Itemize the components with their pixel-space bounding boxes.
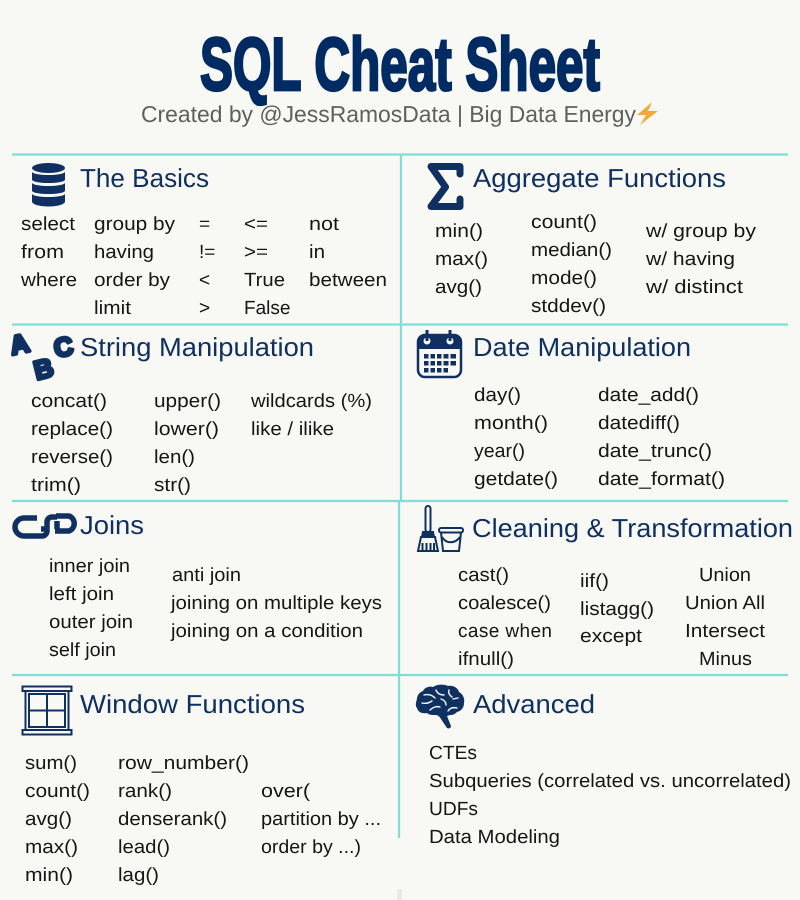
- function list: month(): [474, 413, 548, 434]
- function list: [435, 212, 757, 317]
- function list: partition by ...: [261, 809, 381, 830]
- function list: coalesce(): [458, 593, 551, 614]
- function list: w/ distinct: [645, 277, 744, 298]
- keyword list: having: [94, 242, 154, 263]
- function list: getdate(): [474, 469, 558, 490]
- function list: cast(): [458, 565, 509, 586]
- heading: Cleaning & Transformation: [472, 513, 793, 543]
- icon: brain: [416, 685, 464, 728]
- join list: joining on multiple keys: [170, 593, 382, 614]
- keyword list: group by: [94, 214, 176, 235]
- keyword list: !=: [199, 242, 215, 263]
- panel: Advanced: [416, 685, 791, 848]
- icon: window: [22, 686, 72, 734]
- function list: date_trunc(): [598, 441, 712, 462]
- heading: Joins: [80, 510, 144, 540]
- heading: String Manipulation: [80, 332, 314, 362]
- function list: date_format(): [598, 469, 725, 490]
- function list: str(): [154, 475, 191, 496]
- function list: count(): [25, 781, 90, 802]
- panel: String Manipulation: [7, 327, 372, 496]
- icon: calendar: [417, 330, 462, 377]
- heading: The Basics: [80, 163, 209, 193]
- keyword list: between: [309, 270, 387, 291]
- join list: [49, 556, 382, 661]
- function list: mode(): [531, 268, 597, 289]
- heading: Window Functions: [80, 689, 305, 719]
- subtitle: Created by @JessRamosData | Big Data Energy: [141, 101, 636, 127]
- function list: except: [580, 626, 643, 647]
- function list: count(): [531, 212, 597, 233]
- join list: self join: [49, 640, 116, 661]
- function list: max(): [435, 249, 488, 270]
- join list: anti join: [172, 565, 241, 586]
- function list: lag(): [118, 865, 159, 886]
- join list: joining on a condition: [170, 621, 363, 642]
- function list: concat(): [31, 391, 107, 412]
- function list: over(: [261, 781, 311, 802]
- function list: [25, 753, 381, 886]
- icon: sigma: [431, 166, 460, 206]
- function list: sum(): [25, 753, 77, 774]
- icon: lightning bolt: [637, 102, 658, 125]
- icon: ABC letters: B: [31, 352, 56, 386]
- panel: The Basics: [20, 163, 387, 319]
- keyword list: >: [199, 298, 210, 319]
- keyword list: from: [21, 242, 64, 263]
- function list: min(): [25, 865, 73, 886]
- keyword list: False: [244, 298, 290, 319]
- topic list: Subqueries (correlated vs. uncorrelated): [429, 771, 791, 792]
- function list: year(): [474, 441, 525, 462]
- icon: broom and bucket: [418, 506, 463, 551]
- panel: Cleaning & Transformation: [418, 506, 793, 670]
- function list: max(): [25, 837, 78, 858]
- topic list: UDFs: [429, 799, 478, 820]
- function list: Union All: [685, 593, 765, 614]
- function list: median(): [531, 240, 612, 261]
- keyword list: select: [21, 214, 76, 235]
- icon: ABC letters: C: [52, 330, 75, 363]
- heading: Date Manipulation: [473, 332, 691, 362]
- heading: Advanced: [473, 689, 595, 719]
- function list: len(): [154, 447, 195, 468]
- keyword list: limit: [94, 298, 132, 319]
- function list: [31, 391, 372, 496]
- function list: avg(): [435, 277, 482, 298]
- keyword list: >=: [244, 242, 268, 263]
- title: SQL Cheat Sheet: [200, 22, 600, 106]
- icon: ABC letters: [7, 327, 75, 386]
- function list: date_add(): [598, 385, 699, 406]
- function list: row_number(): [118, 753, 249, 774]
- function list: lower(): [154, 419, 219, 440]
- topic list: CTEs: [429, 743, 477, 764]
- keyword list: =: [199, 214, 210, 235]
- function list: Intersect: [685, 621, 766, 642]
- function list: [458, 565, 766, 670]
- panel: Date Manipulation: [417, 330, 725, 490]
- join list: inner join: [49, 556, 130, 577]
- function list: w/ having: [645, 249, 735, 270]
- keyword list: order by: [94, 270, 171, 291]
- function list: replace(): [31, 419, 113, 440]
- function list: min(): [435, 221, 483, 242]
- function list: order by ...): [261, 837, 361, 858]
- topic list: Data Modeling: [429, 827, 560, 848]
- keyword list: <: [199, 270, 210, 291]
- function list: case when: [458, 621, 552, 642]
- icon: database: [32, 163, 65, 206]
- function list: avg(): [25, 809, 72, 830]
- function list: [474, 385, 725, 490]
- keyword list: in: [309, 242, 325, 263]
- function list: upper(): [154, 391, 221, 412]
- keyword list: <=: [244, 214, 268, 235]
- function list: day(): [474, 385, 521, 406]
- function list: stddev(): [531, 296, 606, 317]
- function list: rank(): [118, 781, 172, 802]
- keyword list: where: [20, 270, 77, 291]
- join list: outer join: [49, 612, 133, 633]
- topic list: [429, 743, 791, 848]
- panel: Aggregate Functions: [431, 163, 757, 317]
- heading: Aggregate Functions: [473, 163, 726, 193]
- panel: Window Functions: [22, 686, 381, 886]
- function list: trim(): [31, 475, 81, 496]
- function list: Minus: [699, 649, 752, 670]
- function list: denserank(): [118, 809, 227, 830]
- icon: chain links: [15, 516, 74, 536]
- function list: like / ilike: [251, 419, 334, 440]
- join list: left join: [49, 584, 114, 605]
- function list: reverse(): [31, 447, 113, 468]
- function list: iif(): [580, 571, 609, 592]
- keyword list: not: [309, 214, 340, 235]
- function list: lead(): [118, 837, 170, 858]
- function list: ifnull(): [458, 649, 514, 670]
- function list: Union: [699, 565, 751, 586]
- keyword list: True: [244, 270, 285, 291]
- function list: listagg(): [580, 599, 654, 620]
- icon: ABC letters: A: [7, 327, 32, 361]
- function list: wildcards (%): [250, 391, 372, 412]
- function list: datediff(): [598, 413, 680, 434]
- panel: Joins: [15, 510, 382, 661]
- function list: w/ group by: [645, 221, 757, 242]
- keyword list: [20, 214, 387, 319]
